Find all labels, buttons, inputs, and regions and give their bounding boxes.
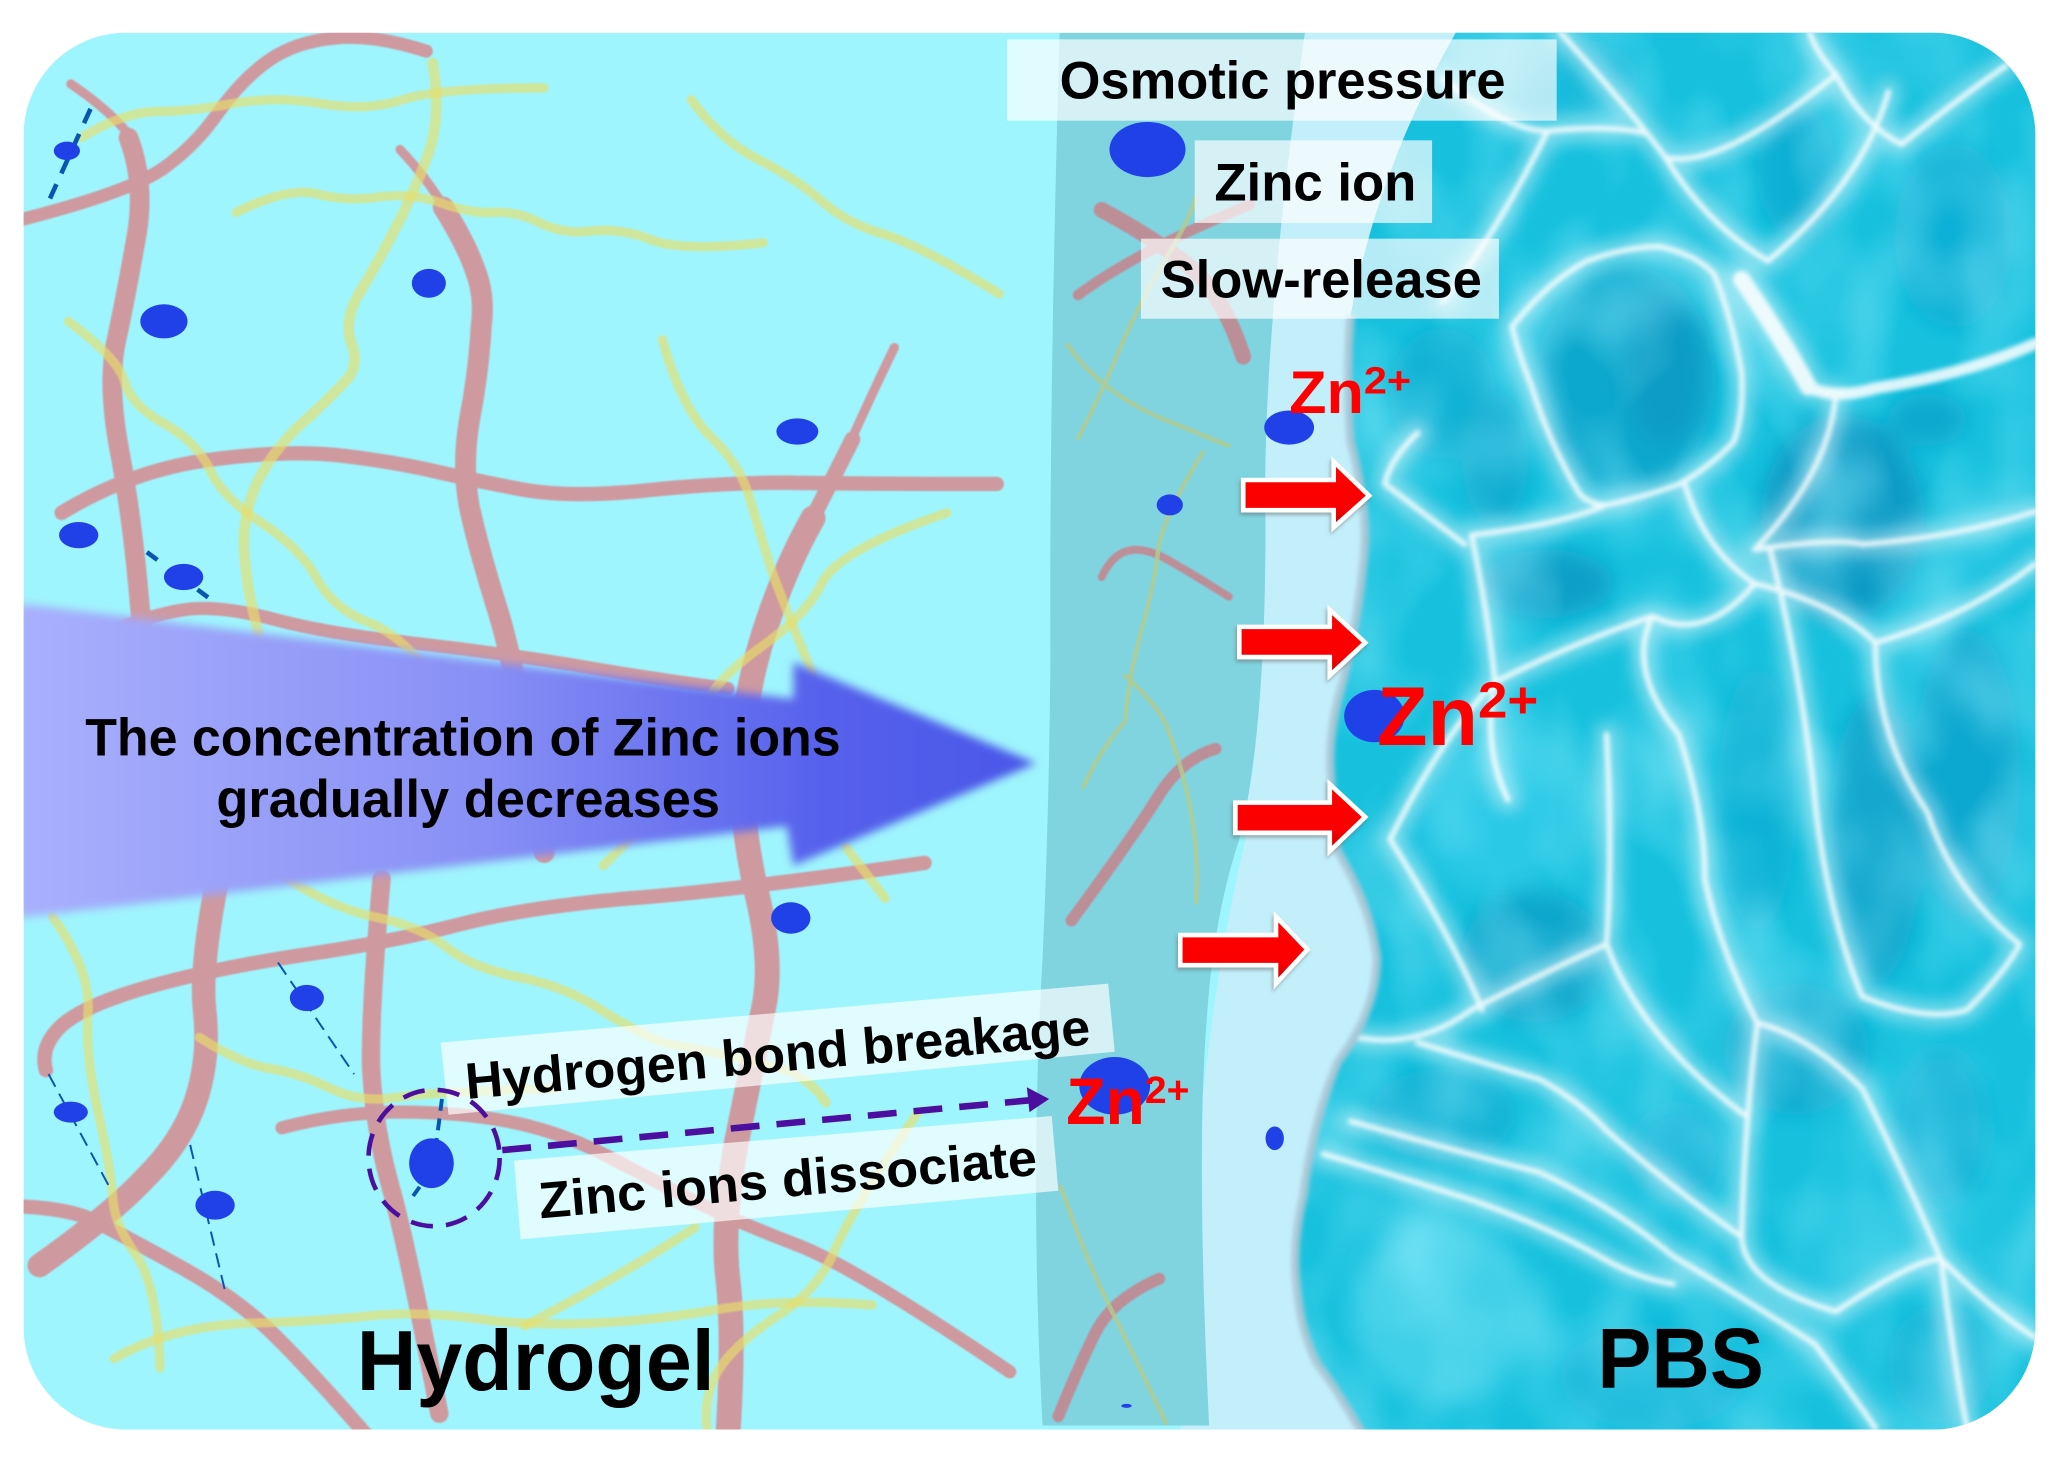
label: PBS: PBS — [1597, 1312, 1764, 1407]
label: Zn2+ lower: 2+ — [1145, 1070, 1189, 1112]
arrow 3 — [1235, 784, 1365, 851]
PBS water region — [1285, 26, 2055, 1443]
red polymer fibres — [24, 37, 1010, 1436]
label: Osmotic pressure — [1007, 39, 1557, 121]
label: Zn2+ large — [1377, 669, 1538, 763]
label: Slow-release — [1141, 239, 1499, 319]
concentration arrow caption: gradually decreases — [216, 771, 720, 829]
label: Zn2+ upper: 2+ — [1364, 360, 1411, 402]
water mottling — [1285, 26, 2055, 1443]
label: Zinc ion — [1195, 140, 1432, 223]
label: Zn2+ upper: Zn — [1289, 358, 1364, 426]
label: Slow-release: Slow-release — [1161, 252, 1482, 310]
label: Zn2+ large: Zn — [1377, 669, 1478, 763]
soft caustic glow — [1323, 33, 2035, 1428]
teal hydrogel interface band — [1036, 33, 1305, 1426]
fibres inside teal band — [1058, 205, 1250, 1416]
label: Zinc ion: Zinc ion — [1214, 155, 1416, 213]
label: Zinc ions dissociate: Zinc ions dissociate — [536, 1129, 1039, 1229]
red arrows: diffusion into PBS — [1180, 462, 1369, 984]
arrow 2 — [1239, 610, 1365, 675]
label: Osmotic pressure: Osmotic pressure — [1060, 52, 1506, 110]
concentration arrow caption — [85, 709, 841, 829]
crisp caustic lines — [1323, 33, 2035, 1428]
label: Zn2+ upper — [1289, 358, 1411, 426]
label: Zn2+ lower: Zn — [1066, 1065, 1145, 1138]
water edge — [1295, 315, 1377, 1436]
arrow 4 — [1180, 917, 1307, 984]
hydrogen-bond dashed lines — [47, 109, 442, 1293]
label: Hydrogen bond breakage: Hydrogen bond breakage — [463, 999, 1092, 1110]
faint fibres inside teal band — [1061, 197, 1229, 1423]
yellow polymer fibres — [52, 63, 999, 1436]
concentration arrow caption: The concentration of Zinc ions — [85, 709, 841, 767]
dissociation dashed circle — [369, 1090, 500, 1226]
light diffusion band — [1180, 32, 1456, 1430]
zinc ions — [54, 122, 1405, 1408]
big concentration gradient arrow — [18, 603, 1036, 918]
label: Zn2+ lower — [1066, 1065, 1189, 1138]
label: Zn2+ large: 2+ — [1478, 671, 1538, 728]
arrow 1 — [1243, 462, 1369, 527]
dissociation dashed arrow — [502, 1087, 1049, 1150]
label: Hydrogel: Hydrogel — [357, 1314, 715, 1409]
